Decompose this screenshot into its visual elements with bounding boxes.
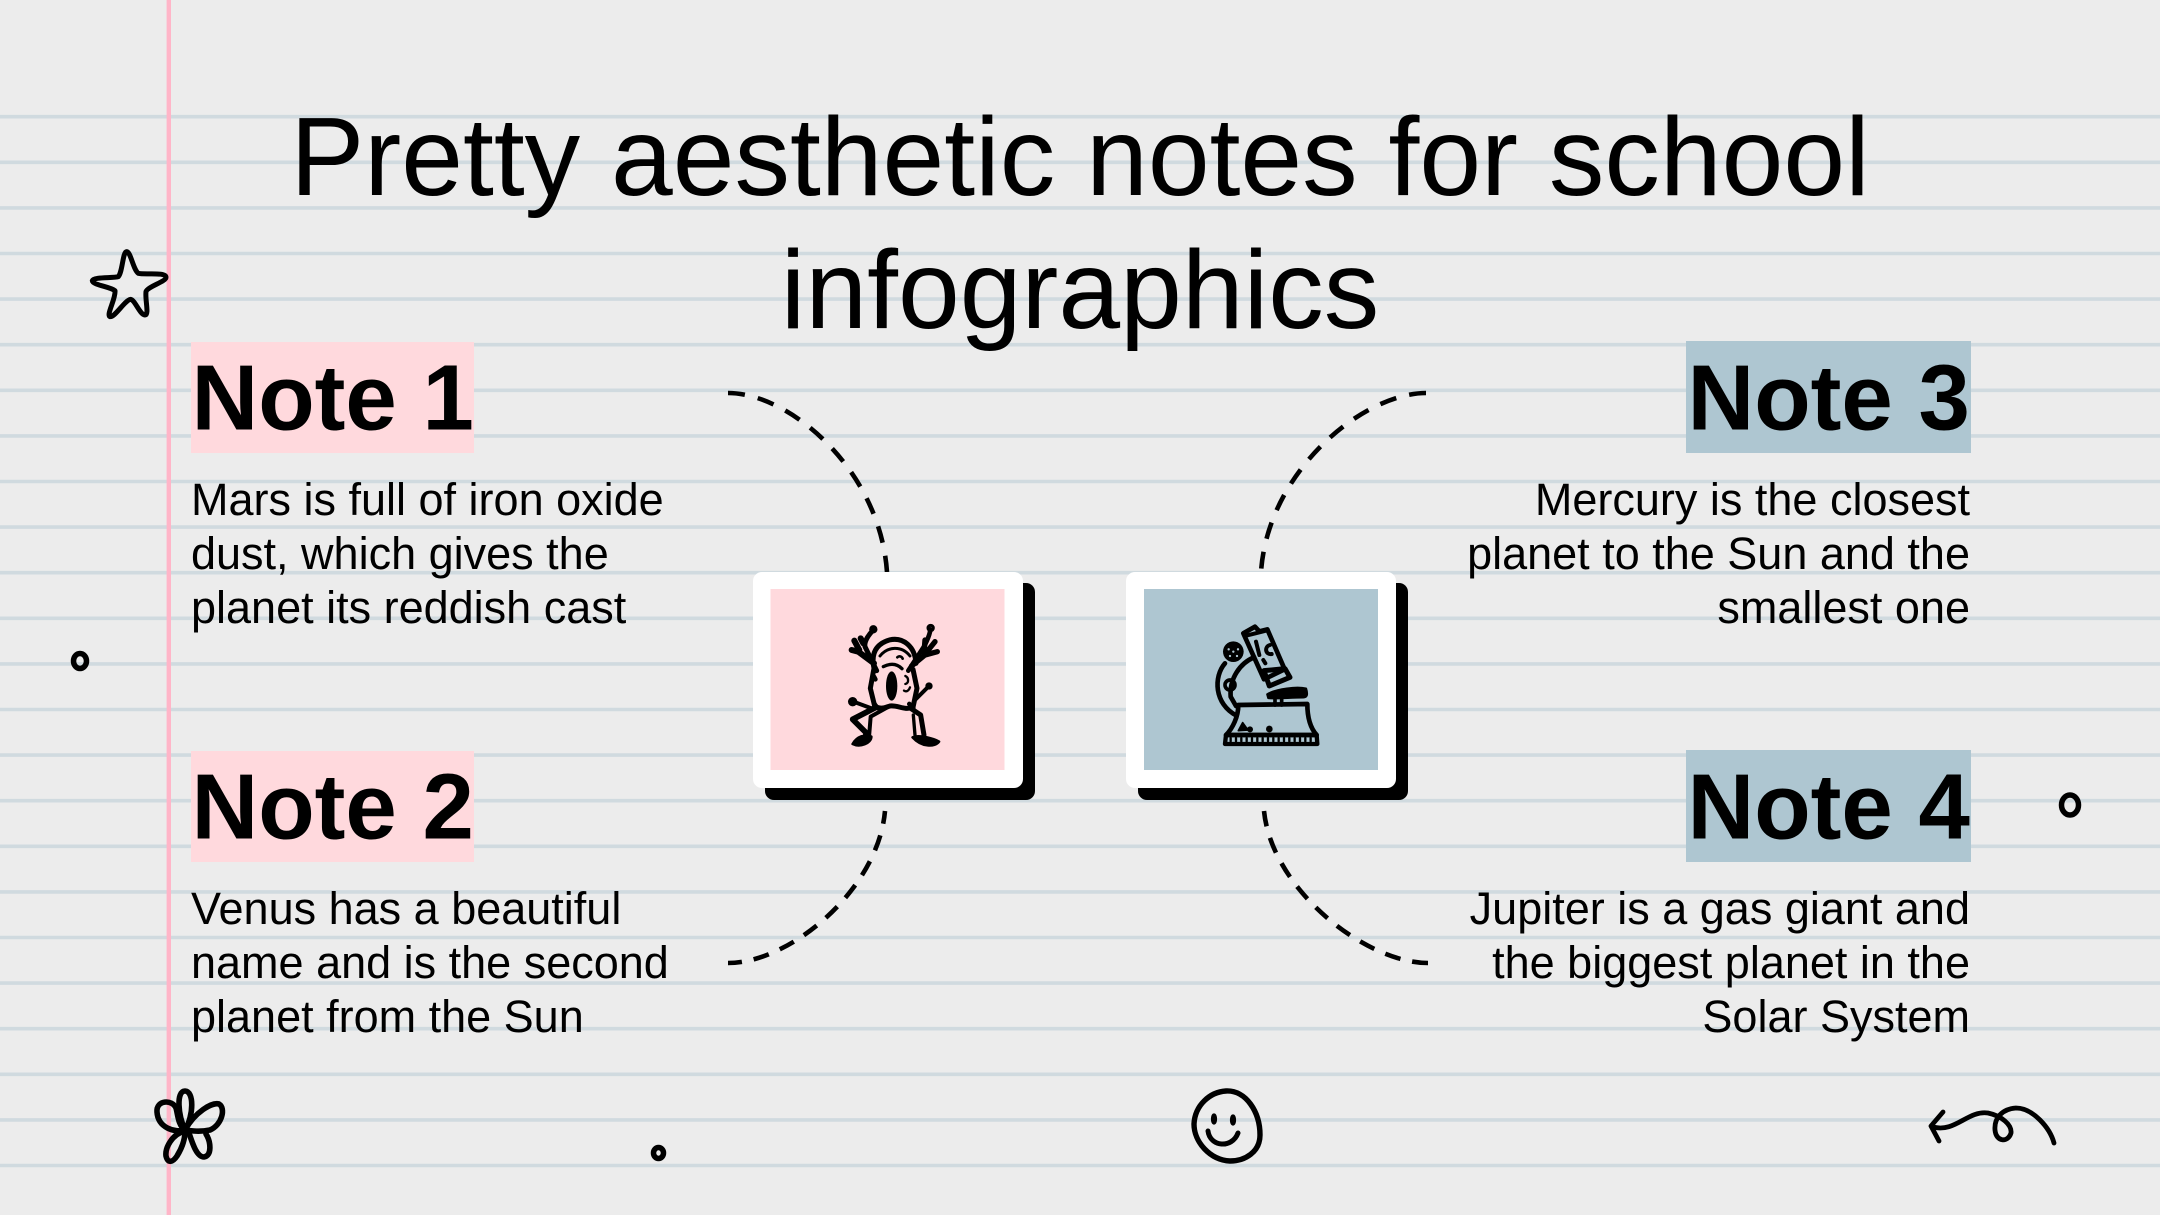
icon: bottom dot — [654, 1148, 664, 1158]
icon: frog — [848, 625, 939, 745]
note 4 text — [1470, 883, 1970, 1042]
note 4 text: Jupiter is a gas giant and — [1470, 883, 1970, 934]
note 2 heading: Note 2 — [192, 754, 474, 858]
card: frog — [753, 572, 1035, 800]
note 2 text — [191, 883, 669, 1042]
note 2 text: name and is the second — [191, 937, 669, 988]
card: microscope — [1126, 572, 1408, 800]
note 1 text: planet its reddish cast — [191, 582, 627, 633]
icon: microscope — [1218, 627, 1317, 744]
note 4 text: the biggest planet in the — [1492, 937, 1970, 988]
icon: right dot — [2062, 795, 2078, 815]
title — [290, 95, 1870, 352]
panel: note 1 — [191, 342, 664, 633]
note 1 text: dust, which gives the — [191, 528, 609, 579]
note 1 text — [191, 474, 664, 633]
connector: note 4 to microscope card — [1264, 811, 1428, 963]
note 4 text: Solar System — [1702, 991, 1970, 1042]
connector: note 1 to frog card — [728, 393, 887, 572]
connector: note 2 to frog card — [728, 811, 885, 963]
note 2 text: Venus has a beautiful — [191, 883, 621, 934]
note 2 text: planet from the Sun — [191, 991, 584, 1042]
title: Pretty aesthetic notes for school — [290, 95, 1870, 219]
icon: left dot — [74, 654, 86, 668]
icon: flower — [157, 1091, 222, 1161]
note 3 heading: Note 3 — [1688, 346, 1970, 450]
connector: note 3 to microscope card — [1261, 393, 1426, 572]
note 1 text: Mars is full of iron oxide — [191, 474, 664, 525]
panel: note 4 — [1470, 750, 1971, 1042]
note 3 text: smallest one — [1717, 582, 1970, 633]
icon: curly arrow — [1931, 1108, 2054, 1143]
panel: note 2 — [191, 751, 669, 1042]
title: infographics — [781, 228, 1379, 352]
panel: note 3 — [1467, 341, 1971, 633]
note 3 text: planet to the Sun and the — [1467, 528, 1970, 579]
icon: star — [92, 252, 166, 317]
note 4 heading: Note 4 — [1688, 754, 1970, 858]
note 1 heading: Note 1 — [192, 346, 474, 450]
note 3 text — [1467, 474, 1970, 633]
note 3 text: Mercury is the closest — [1535, 474, 1970, 525]
icon: smiley — [1194, 1091, 1260, 1161]
